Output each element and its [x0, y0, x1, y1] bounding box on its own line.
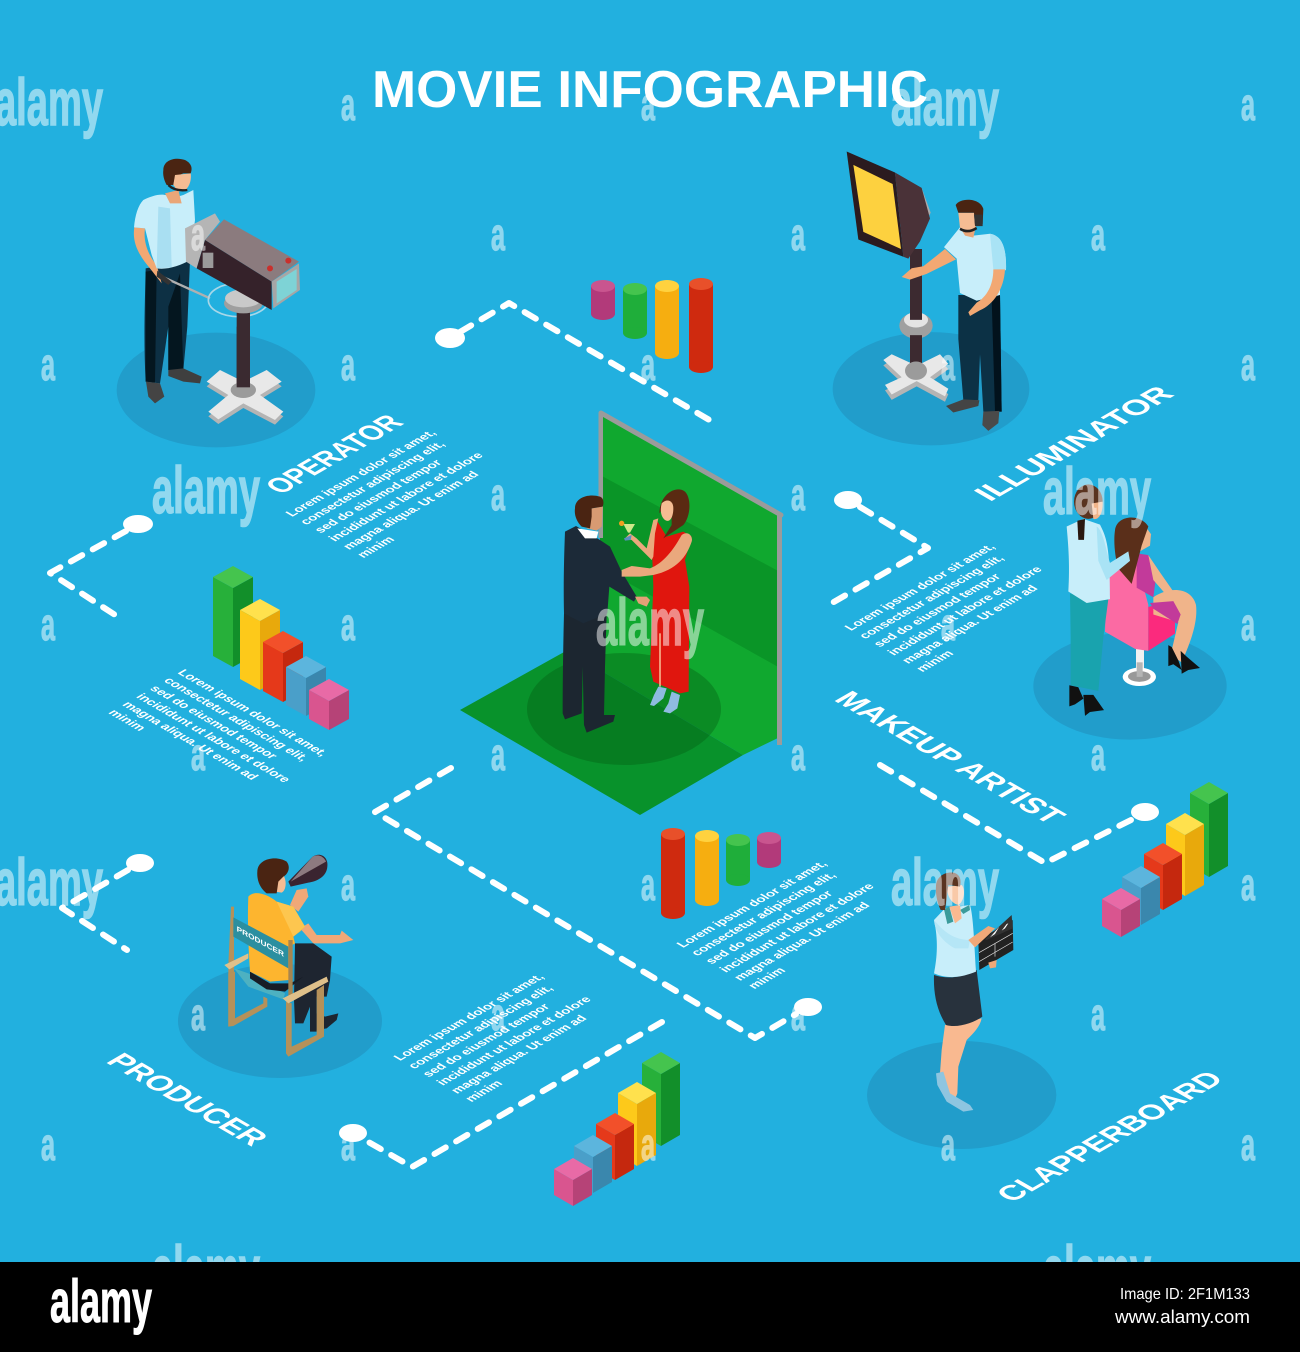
chart: top cylinders: [591, 278, 713, 373]
watermark: large marks: alamy: [0, 845, 103, 919]
watermark: small marks: a: [191, 209, 206, 260]
text block: makeup: Lorem ipsum dolor sit amet,: [841, 542, 998, 633]
connector: makeup upper: [832, 491, 928, 603]
text block: makeup: magna aliqua. Ut enim ad: [899, 583, 1041, 666]
text block: makeup: consectetur adipiscing elit,: [856, 553, 1007, 641]
watermark: large marks: alamy: [596, 585, 704, 659]
text block: operator: Lorem ipsum dolor sit amet,: [282, 428, 439, 519]
watermark: small marks: a: [641, 859, 656, 910]
watermark: small marks: a: [41, 1119, 56, 1170]
watermark: small marks: a: [341, 79, 356, 130]
website: www.alamy.com: [1114, 1307, 1250, 1327]
text block: left chart: sed do eiusmod tempor: [147, 683, 281, 761]
text block: producer: magna aliqua. Ut enim ad: [448, 1013, 590, 1096]
chart: right isometric bars: [1102, 782, 1228, 937]
text block: operator: magna aliqua. Ut enim ad: [340, 469, 482, 552]
text block: centre: sed do eiusmod tempor: [702, 889, 836, 966]
watermark: small marks: a: [1091, 209, 1106, 260]
watermark: small marks: a: [191, 989, 206, 1040]
footer logo: alamy: [50, 1268, 152, 1335]
watermark: small marks: a: [791, 989, 806, 1040]
panel: producer figure: PRODUCER: [237, 924, 285, 959]
watermark: small marks: a: [341, 859, 356, 910]
watermark: large marks: alamy: [0, 65, 103, 139]
watermark: small marks: a: [491, 469, 506, 520]
label: operator: OPERATOR: [258, 410, 411, 499]
chart: left isometric bars: [213, 566, 349, 730]
watermark: small marks: a: [641, 1119, 656, 1170]
watermark: large marks: alamy: [891, 65, 999, 139]
text block: producer: minim: [462, 1078, 506, 1104]
watermark: small marks: a: [341, 339, 356, 390]
watermark: small marks: a: [1241, 1119, 1256, 1170]
woman in red dress: [622, 489, 692, 713]
watermark: small marks: a: [641, 339, 656, 390]
text block: centre: magna aliqua. Ut enim ad: [731, 900, 873, 983]
watermark: large marks: alamy: [891, 845, 999, 919]
panel: actors: [563, 489, 692, 733]
watermark: small marks: a: [791, 469, 806, 520]
panel: clapperboard figure: [867, 873, 1056, 1149]
text block: centre: consectetur adipiscing elit,: [688, 870, 839, 958]
title: MOVIE INFOGRAPHIC: [372, 61, 928, 119]
watermark: small marks: a: [491, 209, 506, 260]
watermark: small marks: a: [1241, 339, 1256, 390]
connector: right: [880, 765, 1159, 863]
label: makeup artist: MAKEUP ARTIST: [827, 687, 1072, 829]
text block: producer: Lorem ipsum dolor sit amet,: [390, 972, 547, 1063]
text block: left chart: incididunt ut labore et dolore: [133, 691, 294, 785]
connector: operator: [50, 515, 153, 620]
watermark: small marks: a: [341, 599, 356, 650]
text block: operator: sed do eiusmod tempor: [311, 458, 445, 535]
text block: left chart: magna aliqua. Ut enim ad: [119, 699, 261, 782]
watermark: small marks: a: [1241, 859, 1256, 910]
text block: operator: consectetur adipiscing elit,: [297, 439, 448, 527]
panel: producer figure: [178, 855, 382, 1078]
watermark: small marks: a: [491, 729, 506, 780]
text block: producer: consectetur adipiscing elit,: [405, 983, 556, 1071]
text block: left chart: consectetur adipiscing elit,: [161, 675, 312, 763]
text block: producer: sed do eiusmod tempor: [419, 1002, 553, 1079]
watermark: small marks: a: [941, 339, 956, 390]
watermark: small marks: a: [491, 989, 506, 1040]
watermark: small marks: a: [791, 729, 806, 780]
text block: makeup: incididunt ut labore et dolore: [884, 564, 1045, 657]
connector: producer upper: [62, 854, 154, 950]
connector: top centre: [435, 303, 718, 425]
text block: makeup: minim: [913, 648, 957, 674]
watermark: small marks: [41, 79, 1256, 1170]
panel: green screen stage: [460, 413, 782, 815]
watermark: small marks: a: [341, 1119, 356, 1170]
label: producer: PRODUCER: [99, 1049, 275, 1151]
text block: operator: incididunt ut labore et dolore: [325, 450, 486, 543]
image id: Image ID: 2F1M133: [1120, 1286, 1250, 1303]
watermark: large marks: alamy: [152, 1232, 260, 1306]
connector: centre long: [375, 768, 822, 1038]
watermark: small marks: a: [41, 599, 56, 650]
label: clapperboard: CLAPPERBOARD: [989, 1067, 1231, 1207]
text block: centre: minim: [745, 965, 789, 991]
connector: bottom: [339, 1022, 662, 1167]
watermark: large marks: alamy: [152, 453, 260, 527]
panel: makeup artist figure: [1033, 484, 1227, 740]
label: illuminator: ILLUMINATOR: [967, 382, 1182, 506]
watermark: small marks: a: [941, 1119, 956, 1170]
panel: illuminator figure: [833, 151, 1029, 445]
text block: operator: minim: [354, 534, 398, 560]
text block: producer: incididunt ut labore et dolore: [433, 994, 594, 1087]
watermark: large marks: alamy: [1043, 1232, 1151, 1306]
watermark: small marks: a: [1241, 79, 1256, 130]
text block: left chart: minim: [105, 707, 149, 733]
text block: centre: incididunt ut labore et dolore: [716, 881, 877, 974]
watermark: small marks: a: [1091, 989, 1106, 1040]
watermark: small marks: a: [1091, 729, 1106, 780]
text block: centre: Lorem ipsum dolor sit amet,: [673, 859, 830, 950]
watermark: small marks: a: [191, 729, 206, 780]
watermark: large marks: alamy: [1043, 454, 1151, 528]
text block: makeup: sed do eiusmod tempor: [870, 572, 1004, 649]
watermark: small marks: a: [641, 79, 656, 130]
panel: operator figure: [117, 159, 315, 447]
watermark: small marks: a: [941, 599, 956, 650]
cocktail glass: [619, 521, 635, 541]
chart: bottom isometric bars: [554, 1052, 680, 1206]
text block: left chart: Lorem ipsum dolor sit amet,: [174, 667, 331, 758]
watermark: small marks: a: [1241, 599, 1256, 650]
watermark: small marks: a: [791, 209, 806, 260]
man in suit: [563, 495, 650, 733]
chart: centre cylinders: [661, 828, 781, 919]
watermark: small marks: a: [41, 339, 56, 390]
footer bar: [0, 1262, 1300, 1352]
